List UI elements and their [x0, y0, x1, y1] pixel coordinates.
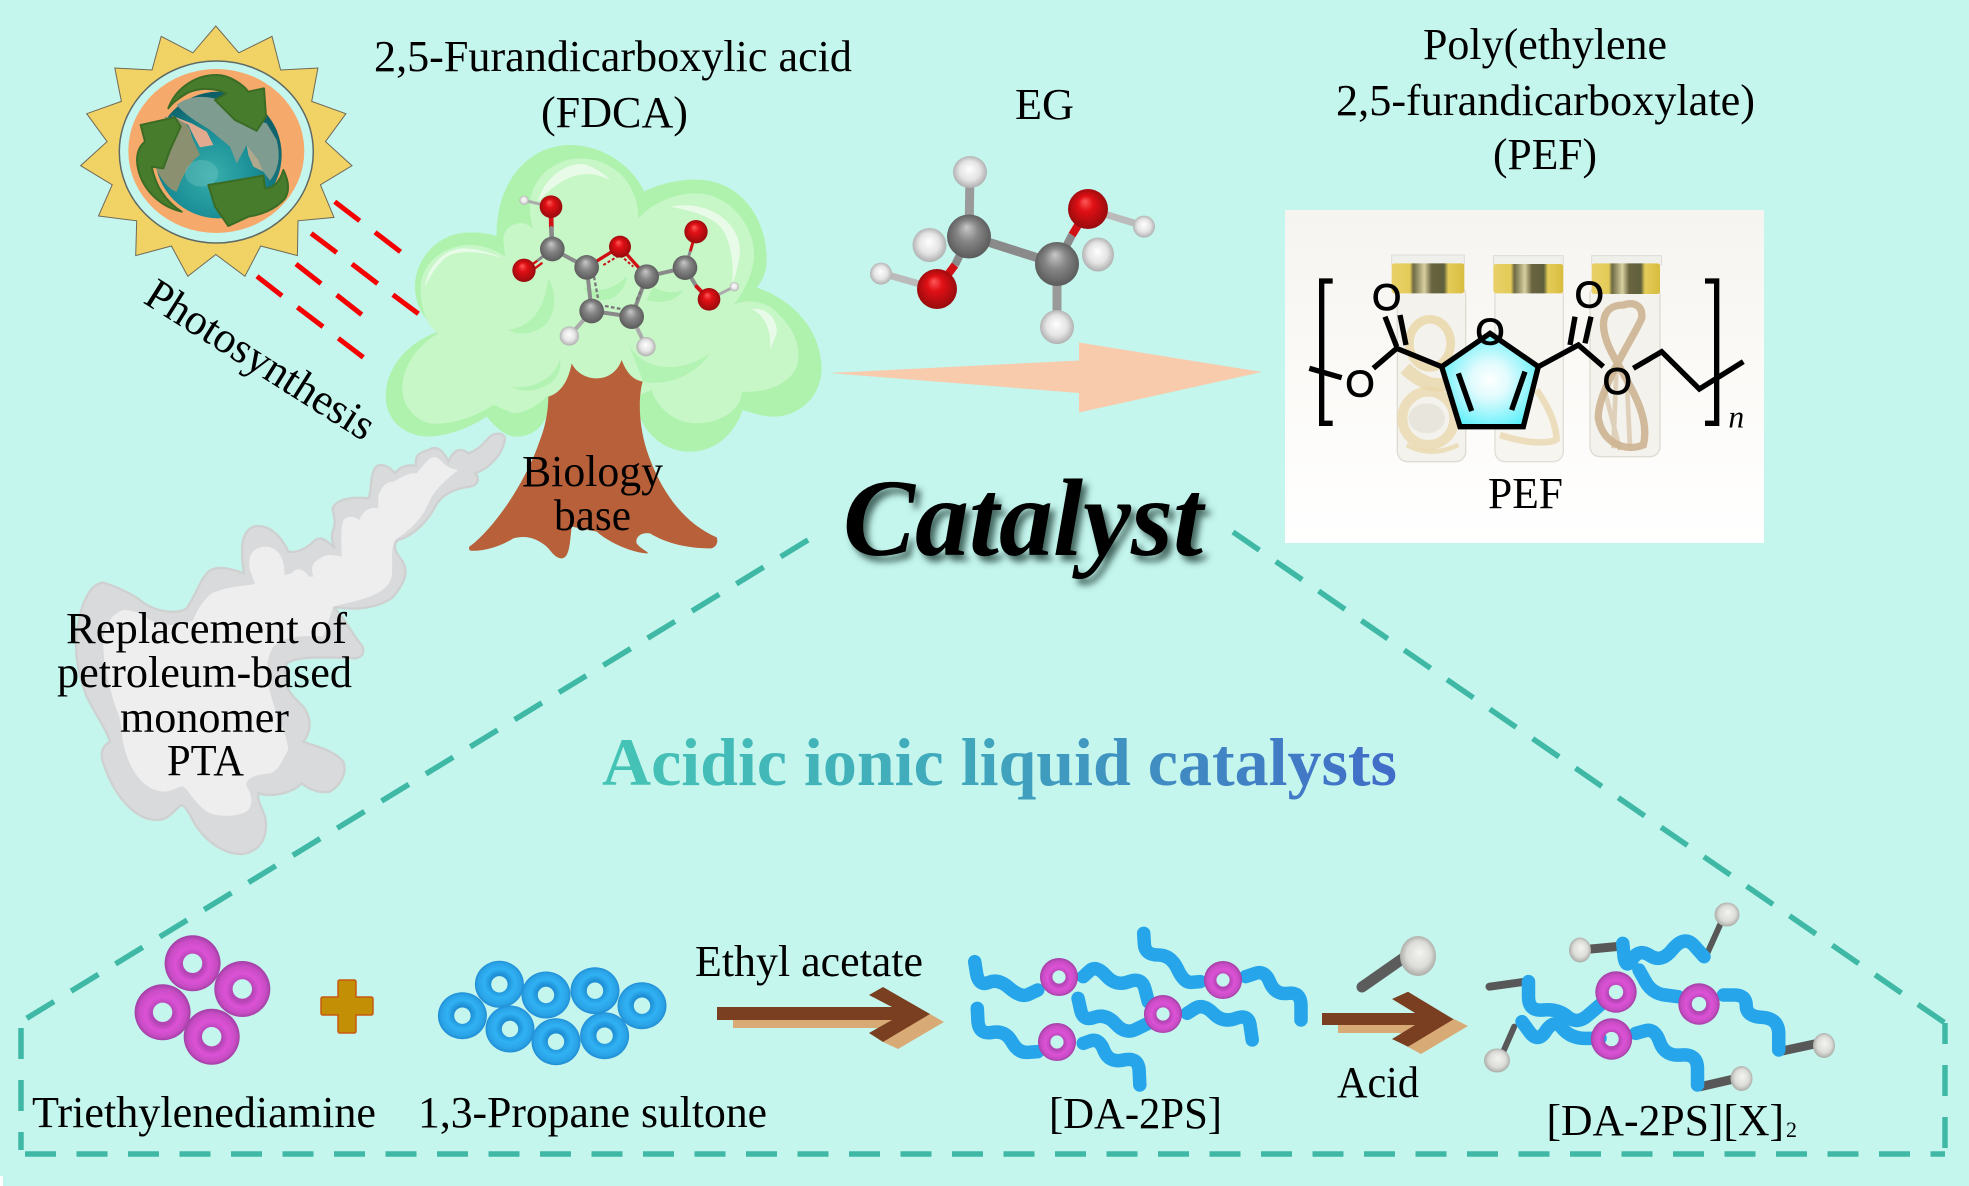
PEF repeat-unit structure: O	[1603, 360, 1632, 402]
label: [DA-2PS][X]2: 2	[1786, 1117, 1797, 1142]
heading: PEF full name: Poly(ethylene	[1423, 20, 1667, 69]
orange inner disc	[128, 69, 304, 233]
label: propane sultone: 1,3-Propane sultone	[418, 1088, 767, 1137]
label: replacement of petroleum-based monomer PTA: petroleum-based	[57, 648, 352, 697]
PEF repeat-unit structure	[1309, 274, 1744, 434]
icon: [DA-2PS][X]2 chains with anions	[1484, 902, 1835, 1091]
icon: propane sultone rings	[438, 961, 666, 1065]
label: triethylenediamine: Triethylenediamine	[32, 1088, 376, 1137]
PEF repeat-unit structure: O	[1475, 310, 1505, 352]
label: replacement of petroleum-based monomer PTA: monomer	[120, 693, 289, 742]
label: replacement of petroleum-based monomer PTA: Replacement of	[66, 604, 347, 653]
tree trunk	[469, 360, 717, 558]
tree crown	[386, 145, 822, 452]
PEF repeat-unit structure: O	[1575, 274, 1604, 316]
ethylene glycol molecule model	[870, 156, 1155, 344]
label: biology base: Biology	[522, 447, 663, 496]
label: photosynthesis: Photosynthesis	[137, 269, 384, 450]
smoke cloud: petroleum	[76, 434, 505, 854]
icon: sun with recycled earth	[81, 26, 352, 276]
tree	[386, 145, 822, 558]
panel: PEF photo with structure	[1285, 210, 1764, 543]
icon: [DA-2PS] chains	[975, 933, 1301, 1085]
heading: Catalyst: Catalyst	[843, 457, 1206, 579]
sun disc	[119, 61, 313, 243]
jars with PEF fibres	[1392, 255, 1662, 462]
label: biology base: base	[554, 491, 631, 540]
sunlight dashes	[257, 202, 418, 357]
label: replacement of petroleum-based monomer PTA: PTA	[167, 736, 244, 785]
label: PEF sample: PEF	[1488, 469, 1563, 518]
heading: PEF full name: 2,5-furandicarboxylate)	[1336, 76, 1755, 125]
heading: FDCA: 2,5-Furandicarboxylic acid	[374, 32, 852, 81]
heading: EG: EG	[1015, 80, 1074, 129]
heading: PEF full name	[1336, 20, 1755, 179]
arrow: acid reaction	[1322, 992, 1468, 1054]
heading: FDCA: (FDCA)	[541, 88, 688, 137]
arrow: monomers to PEF	[829, 342, 1262, 412]
globe	[155, 92, 282, 218]
arrow: ethyl acetate reaction	[717, 987, 944, 1049]
icon: plus sign	[321, 980, 373, 1033]
sun rays	[81, 26, 352, 276]
icon: triethylenediamine rings	[135, 935, 270, 1065]
icon: acid molecule	[1362, 936, 1436, 987]
label: biology base	[522, 447, 663, 540]
label: [DA-2PS][X]2: [DA-2PS][X]	[1546, 1096, 1784, 1145]
heading: acidic ionic liquid catalysts: Acidic ionic liquid catalysts	[602, 724, 1397, 800]
PEF repeat-unit structure: O	[1345, 363, 1375, 405]
PEF repeat-unit structure: n	[1728, 399, 1744, 434]
label: ethyl acetate: Ethyl acetate	[695, 937, 923, 986]
dashed catalyst outline	[19, 532, 1945, 1154]
label: replacement of petroleum-based monomer PTA	[57, 604, 352, 785]
heading: PEF full name: (PEF)	[1493, 130, 1597, 179]
FDCA molecule model	[512, 195, 739, 356]
recycling arrows made of grass	[137, 75, 288, 226]
heading: FDCA	[374, 32, 852, 137]
label: acid: Acid	[1337, 1058, 1419, 1107]
PEF repeat-unit structure: O	[1372, 276, 1401, 318]
label: [DA-2PS]: [DA-2PS]	[1049, 1089, 1222, 1138]
